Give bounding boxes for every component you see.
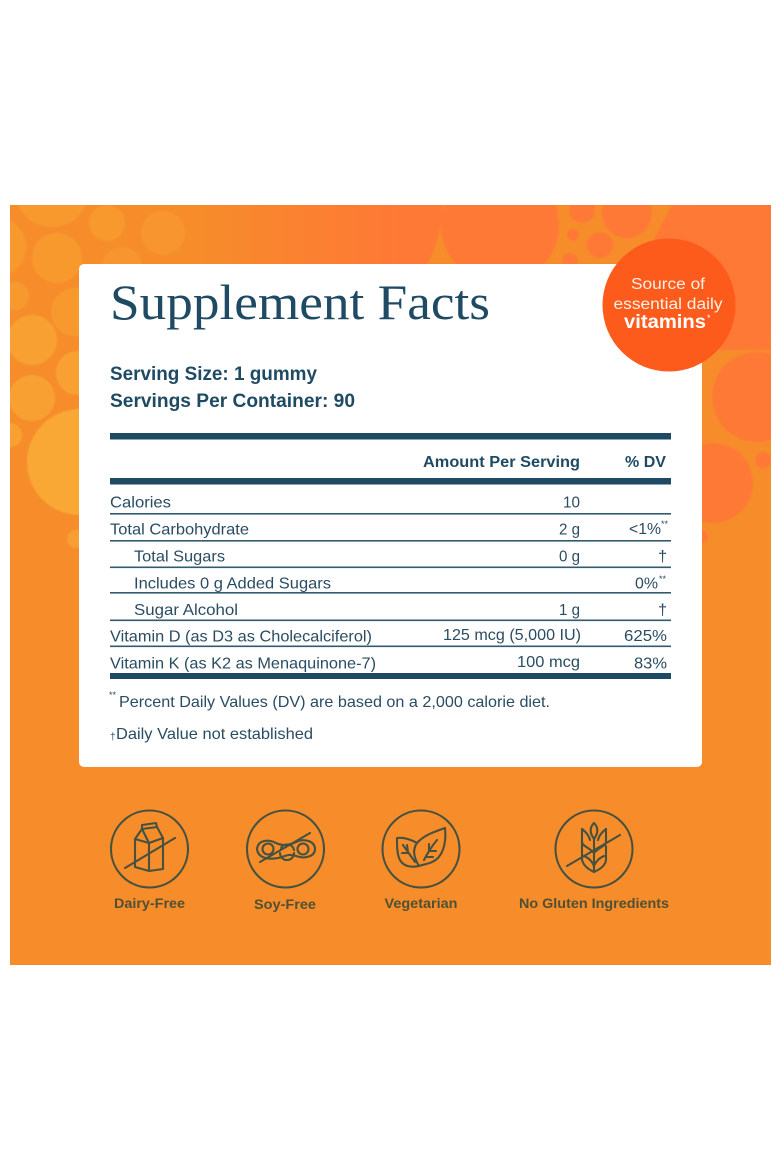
footnotes: Daily Value not established [116, 726, 313, 743]
nutrition table rows: Includes 0 g Added Sugars [134, 576, 331, 592]
nutrition table rows: 125 mcg (5,000 IU) [443, 627, 581, 644]
nutrition table rows: 83% [634, 656, 667, 672]
nutrition table rows: Calories [110, 494, 171, 512]
label: dairy-free: Dairy-Free [114, 895, 185, 911]
nutrition table rows: ** [661, 519, 669, 529]
nutrition table rows: 0% [635, 576, 658, 592]
badge: source of essential daily vitamins: essential daily [614, 296, 723, 313]
nutrition table rows: 2 g [559, 522, 580, 538]
nutrition table rows: Vitamin D (as D3 as Cholecalciferol) [110, 628, 372, 646]
icon: soy-free [247, 810, 324, 888]
nutrition table rows: † [658, 602, 667, 619]
nutrition table rows: Vitamin K (as K2 as Menaquinone-7) [110, 656, 376, 672]
serving information [110, 364, 355, 412]
icon: no gluten ingredients [556, 810, 632, 888]
icon: vegetarian [382, 810, 460, 888]
nutrition table rows: † [658, 548, 667, 566]
footnotes: † [110, 732, 116, 743]
nutrition table rows: Total Sugars [134, 548, 225, 566]
nutrition table rows: 100 mcg [517, 654, 580, 671]
nutrition table rows: <1% [629, 521, 661, 538]
serving information: Serving Size: 1 gummy [110, 364, 317, 385]
nutrition table rows: 625% [624, 628, 667, 645]
table header: Amount Per Serving [423, 454, 580, 471]
label: no gluten ingredients: No Gluten Ingredients [519, 895, 669, 911]
table header: % DV [625, 454, 667, 471]
label: soy-free: Soy-Free [254, 896, 316, 912]
nutrition table rows: 10 [563, 494, 580, 512]
nutrition table rows: ** [659, 574, 667, 584]
badge: source of essential daily vitamins: Source of [631, 276, 706, 293]
title: Supplement Facts [110, 274, 490, 330]
serving information: Servings Per Container: 90 [110, 391, 355, 412]
table header [110, 433, 671, 484]
nutrition table rows: 1 g [559, 602, 580, 619]
nutrition table rows: 0 g [559, 548, 580, 566]
footnotes [109, 690, 550, 743]
label: vegetarian: Vegetarian [384, 895, 458, 911]
nutrition table rows [110, 494, 671, 679]
badge: source of essential daily vitamins [602, 238, 736, 372]
nutrition table rows: Total Carbohydrate [110, 522, 249, 538]
footnotes: Percent Daily Values (DV) are based on a 2,000 calorie diet. [119, 694, 550, 711]
footnotes: ** [109, 690, 117, 700]
nutrition table rows: Sugar Alcohol [134, 602, 238, 619]
orange background panel with bubbles [0, 153, 780, 965]
icon: dairy-free [111, 810, 188, 888]
badge: source of essential daily vitamins: * [707, 313, 711, 323]
white supplement facts card [79, 264, 702, 767]
badge: source of essential daily vitamins: vitamins [624, 312, 706, 333]
